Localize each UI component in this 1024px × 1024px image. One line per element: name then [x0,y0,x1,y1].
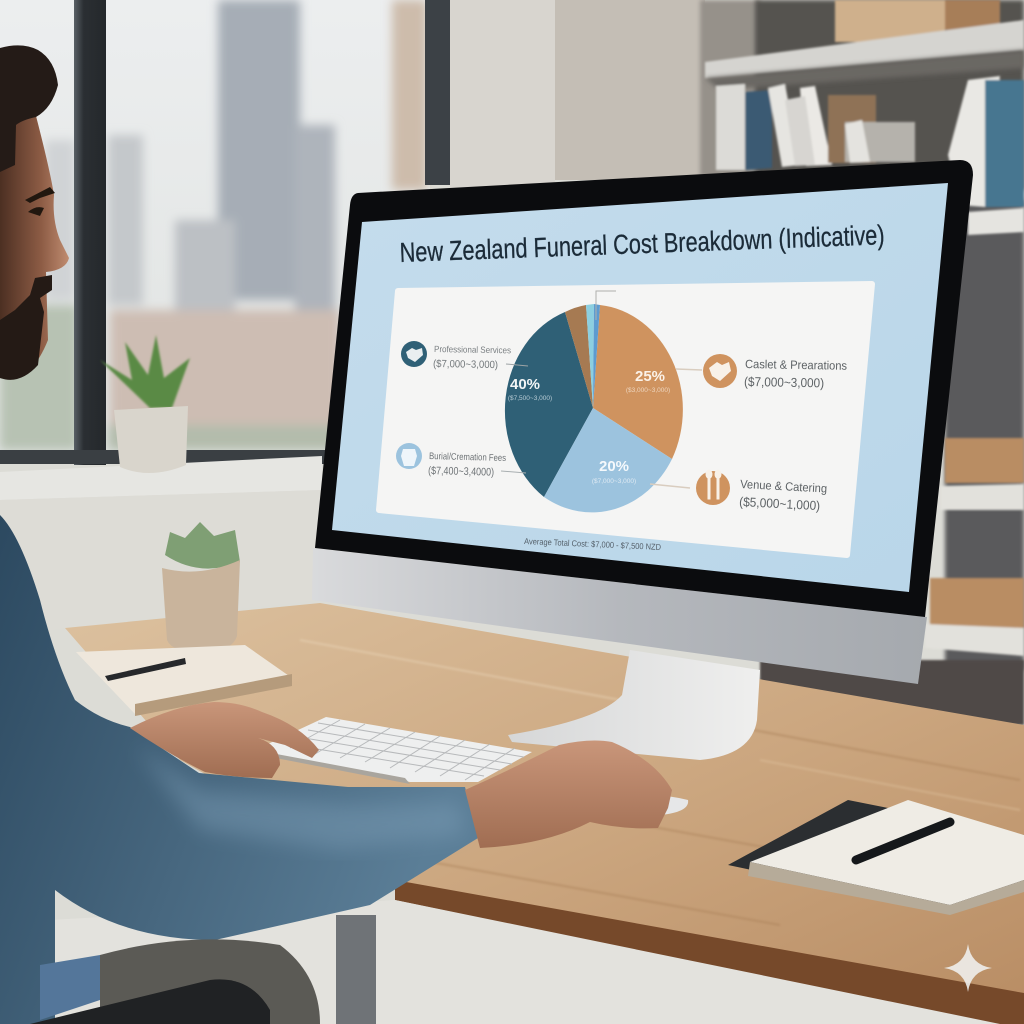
slice: brown [565,305,593,408]
man: trousers and chair [30,939,320,1024]
legend: venue and catering: Venue & Catering [740,477,827,496]
desk [50,603,1024,1024]
keyboard [255,717,532,784]
slice: 20% venue and catering [544,408,672,512]
potted plant on window sill [100,335,190,473]
computer monitor [312,160,973,684]
mouse [610,795,688,815]
slice: 25% casket and preparations [593,305,683,459]
slice: cyan [586,304,594,408]
white chart card [379,284,872,555]
eyebrow and eye [25,187,55,216]
legend: professional services: ($7,000~3,000) [433,358,498,371]
leader line top [596,291,616,320]
legend: professional services: Professional Services [434,344,512,355]
man: torso and arm [0,515,478,1024]
monitor bezel [315,160,973,617]
sleeve highlight [135,745,465,850]
label 25% [626,368,670,394]
computer monitor stand [508,650,760,760]
legend: professional services [401,341,528,371]
label 40%: 40% [510,376,540,393]
window with blurred city view [0,0,450,465]
notebook and pen on right of desk [728,800,1024,915]
footer: average total cost: Average Total Cost: $7,000 - $7,500 NZD [524,536,661,552]
label 25%: ($3,000~3,000) [626,387,670,394]
monitor chin [312,548,927,684]
label 25%: 25% [635,368,665,385]
legend: casket and preparations [676,354,847,390]
screen background [332,183,948,592]
legend: burial and cremation fees: Burial/Cremation Fees [429,451,506,464]
label 20% [592,458,636,485]
label 20%: 20% [599,458,629,475]
slice: blue [593,304,600,408]
label 40% [508,376,552,402]
legend: venue and catering [650,470,827,513]
label 40%: ($7,500~3,000) [508,395,552,402]
hair [0,45,58,172]
legend: casket and preparations: ($7,000~3,000) [744,374,824,390]
sparkle watermark [944,944,992,992]
legend: venue and catering: ($5,000~1,000) [739,494,821,513]
man: head in profile [0,45,69,380]
legend: burial and cremation fees [396,443,526,479]
notebook and pen on left of desk [76,645,292,716]
legend: casket and preparations: Caslet & Prearations [745,357,847,373]
legend: burial and cremation fees: ($7,400~3,4000) [428,465,494,479]
slice: 40% professional services [505,312,593,497]
bookshelf with books [705,0,1024,725]
label 20%: ($7,000~3,000) [592,478,636,485]
screen title: New Zealand Funeral Cost Breakdown (Indicative) [399,221,885,269]
beard [0,275,52,380]
man: left hand on keyboard [130,702,319,778]
pie chart [505,291,683,512]
succulent in pot [162,522,240,653]
man: right hand on mouse [465,741,672,848]
window sill and lower wall [0,456,322,640]
face [0,116,69,379]
